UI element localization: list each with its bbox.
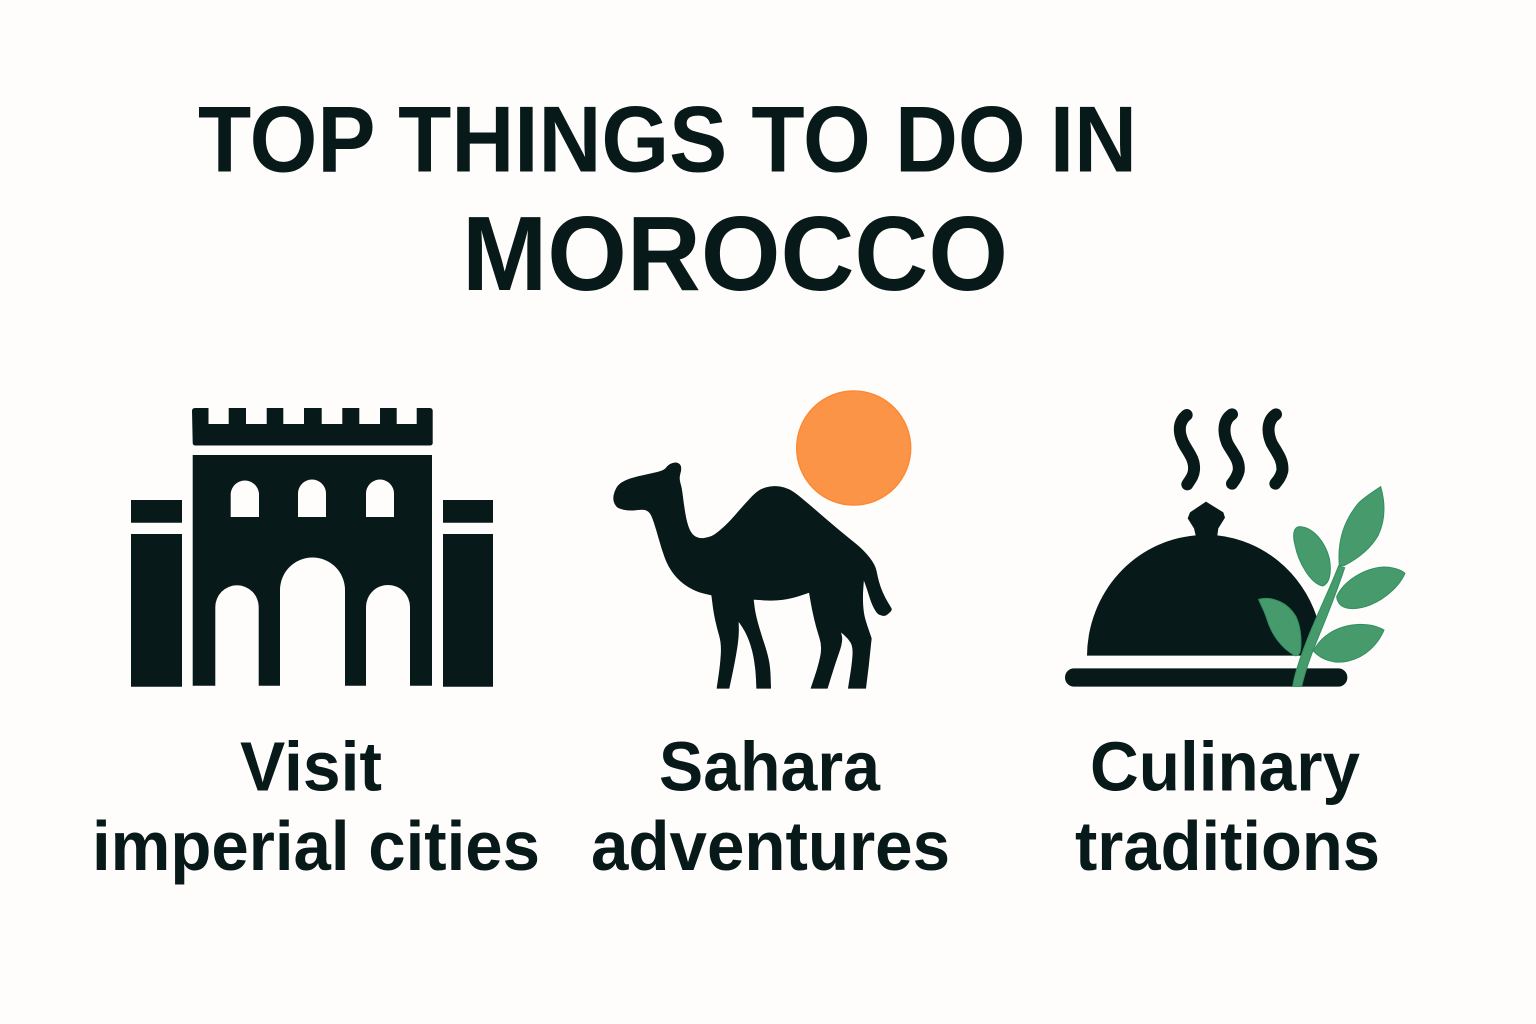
title: MOROCCO [462, 195, 1008, 313]
icon: serving dome [1065, 502, 1347, 687]
label: sahara adventures: adventures [591, 807, 950, 885]
battlements [192, 408, 433, 446]
label: sahara adventures: Sahara [659, 728, 881, 806]
icon: green herb sprig [1259, 487, 1405, 686]
leaf lower left [1259, 598, 1301, 656]
icon: steam [1180, 414, 1282, 484]
gate building with windows and arches [193, 455, 432, 686]
leaf top [1339, 487, 1384, 566]
label: visit imperial cities: Visit [240, 728, 382, 806]
title [198, 86, 1137, 313]
right tower [443, 500, 493, 687]
label: visit imperial cities: imperial cities [92, 807, 540, 885]
left tower [131, 500, 182, 687]
icon: imperial city gate [131, 408, 493, 687]
label: visit imperial cities [92, 728, 540, 885]
stem [1293, 566, 1345, 686]
tray [1065, 668, 1347, 687]
icon: camel [614, 463, 891, 688]
label: culinary traditions [1075, 728, 1380, 885]
leaf lower right [1313, 624, 1384, 662]
leaf right [1337, 567, 1405, 609]
label: culinary traditions: traditions [1075, 807, 1380, 885]
label: sahara adventures [591, 728, 950, 885]
title: TOP THINGS TO DO IN [198, 86, 1137, 192]
icon: sun [797, 391, 911, 505]
label: culinary traditions: Culinary [1090, 728, 1360, 806]
leaf upper left [1294, 527, 1330, 586]
